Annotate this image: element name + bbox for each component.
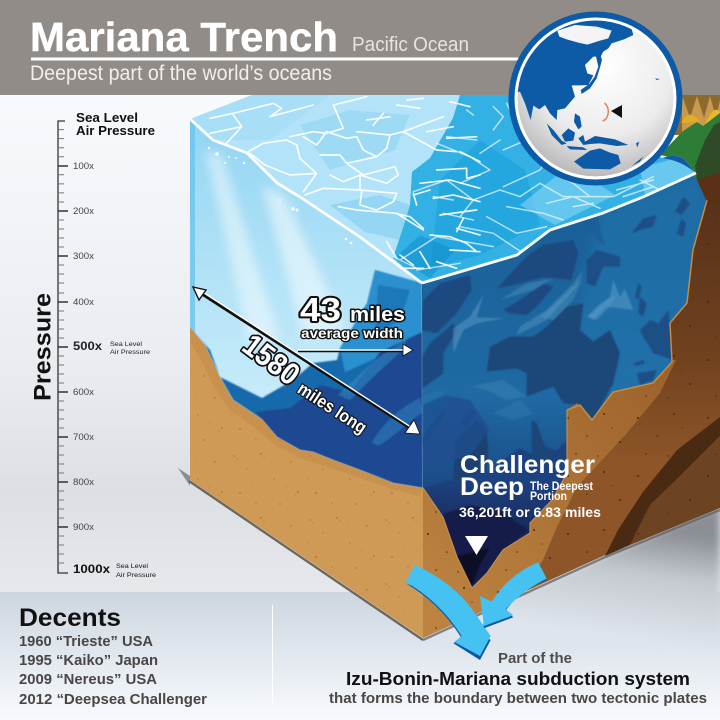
tick labels: 200x [73, 206, 94, 216]
label: 1580 miles long [236, 327, 370, 438]
1000x label: Sea Level [116, 563, 149, 570]
500x label: 500x [73, 341, 103, 353]
tick labels: 400x [73, 297, 94, 307]
descents list: 2009 “Nereus” USA [19, 672, 158, 688]
subtitle location: Pacific Ocean [352, 34, 469, 56]
pressure scale [30, 111, 156, 579]
1000x label: Air Pressure [116, 572, 156, 579]
label: 1580 miles long: 1580 [236, 327, 307, 392]
descents list: 1960 “Trieste” USA [19, 634, 154, 650]
arrow: length 1580 miles [193, 287, 420, 434]
globe locator [508, 12, 682, 186]
tick labels: 100x [73, 161, 94, 171]
arrow: width [298, 344, 413, 356]
background: upper [0, 90, 720, 592]
label: 43 miles average width: miles [350, 304, 405, 326]
1000x label [73, 562, 156, 579]
panel: descents [19, 604, 207, 708]
descents heading: Decents [19, 604, 121, 632]
arrow: right subducting plate [480, 562, 547, 628]
trench mark on globe [602, 103, 608, 121]
label: 1580 miles long: miles long [294, 378, 370, 438]
scale top label: Air Pressure [76, 124, 155, 138]
text block: subduction system: that forms the boundary between two tectonic plates [329, 691, 707, 707]
block ground shadow [178, 468, 720, 648]
globe ring [508, 12, 682, 186]
header rule [31, 58, 521, 60]
tick labels: 900x [73, 522, 94, 532]
globe sphere with land [513, 15, 674, 177]
descents list: 2012 “Deepsea Challenger [19, 692, 207, 708]
title: Mariana Trench [30, 14, 338, 60]
500x label: Sea Level [110, 341, 143, 348]
tagline: Deepest part of the world’s oceans [30, 61, 332, 85]
text block: subduction system [329, 651, 707, 707]
scale top label: Sea Level [76, 111, 138, 125]
right soil face [423, 165, 720, 638]
500x label: Air Pressure [110, 349, 150, 356]
surface bubbles [208, 147, 352, 244]
tick labels: 600x [73, 387, 94, 397]
pointer [611, 105, 622, 118]
label: Challenger Deep [459, 451, 601, 520]
scale axis [58, 121, 68, 573]
tick labels: 300x [73, 251, 94, 261]
panel: trench cross-section block [190, 95, 720, 660]
header band [0, 0, 720, 95]
tick labels: 800x [73, 477, 94, 487]
label: Challenger Deep: Deep [460, 473, 524, 501]
descents list: 1995 “Kaiko” Japan [19, 653, 158, 669]
icon: deepest point marker [465, 536, 488, 555]
label: 43 miles average width: average width [301, 325, 403, 341]
tick labels [73, 161, 94, 532]
background: lower band [0, 592, 720, 720]
right water face [420, 170, 720, 590]
water surface [190, 95, 700, 285]
left sand face [190, 327, 423, 638]
500x label [73, 341, 150, 356]
arrow: left subducting plate [406, 565, 491, 660]
surface front edges [190, 119, 696, 283]
tick labels: 700x [73, 432, 94, 442]
1000x label: 1000x [73, 562, 110, 576]
label: 43 miles average width: 43 [300, 291, 341, 328]
label: Challenger Deep: 36,201ft or 6.83 miles [459, 504, 601, 520]
water edge highlight on soil [423, 200, 707, 588]
land behind the water [660, 95, 720, 205]
globe white rim [514, 18, 676, 180]
arctic ice [557, 25, 612, 45]
descents list [19, 634, 207, 708]
minor ticks [58, 130, 64, 563]
scale top label [76, 111, 155, 138]
text block: subduction system: Part of the [498, 651, 572, 667]
label: 43 miles average width [300, 291, 405, 341]
surface caustics: light zone [210, 97, 480, 268]
surface caustics: blue zone [393, 103, 660, 270]
label: Challenger Deep: The Deepest [530, 481, 593, 493]
left water face [190, 119, 425, 489]
text block: subduction system: Izu-Bonin-Mariana subduction system [346, 669, 690, 689]
label: Challenger Deep: Challenger [460, 451, 595, 479]
major ticks [58, 166, 68, 527]
scale title: Pressure [30, 293, 56, 401]
label: Challenger Deep: Portion [530, 491, 567, 503]
